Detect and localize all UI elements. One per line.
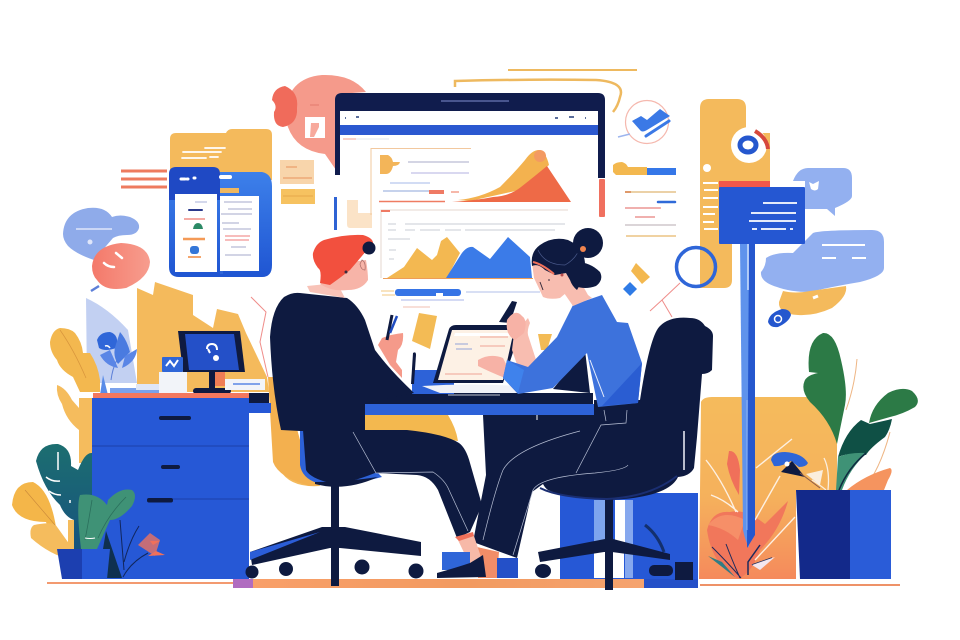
man's glasses [360,260,365,270]
woman's chair and legs [473,318,713,590]
man's neck and collar [307,283,345,298]
coral speech blob behind monitor [272,75,366,170]
lower blue chat bubble [761,230,884,292]
standing pen and notes [411,313,552,384]
laptop [422,325,518,395]
orange chair back [268,377,330,486]
table [249,370,594,441]
top area chart panel [343,139,571,215]
bottom mountain chart panel [381,210,568,307]
yellow skyline [137,282,320,486]
woman [478,228,642,407]
left potted plants [12,444,165,579]
floor line [47,579,900,588]
filing cabinet [92,393,249,579]
coral speech bubble [91,243,150,291]
blue speech bubble [63,208,139,260]
man's chair [246,428,424,586]
planter [796,490,850,579]
blue desk flower [97,332,165,395]
right mini list [613,162,676,236]
small notes left of monitor [280,160,372,230]
right potted plant [771,333,918,579]
man's legs [303,430,482,538]
woman's dark shadow under arm [553,350,590,393]
woman's foot [477,547,518,578]
pot [57,549,82,579]
man [270,235,486,578]
desk cards [159,357,265,393]
blue ring blob [768,309,791,327]
left tablet with yellow folder [121,129,272,277]
pale blue shape [86,298,137,383]
man's hand and pen [378,333,403,378]
tall yellow panel [700,99,770,288]
blue bloom [771,452,808,467]
coral lines [121,171,167,187]
man's head [320,260,368,290]
monitor [335,93,605,307]
diamond icons [623,263,650,296]
blue sign card [719,187,805,244]
right storage box behind chair [560,493,698,580]
top yellow connector lines [455,70,637,112]
check mark badge [618,100,670,144]
yellow leaves on left [50,328,100,550]
magnifier ring [676,248,716,286]
woman's hand on laptop [478,356,510,378]
small desk monitor [178,331,245,394]
upper blue chat bubble [770,168,852,216]
woman's neck [562,280,592,306]
woman's torso [503,295,642,407]
signpost pole [740,244,755,548]
right yellow box with plants [699,397,837,579]
man's torso [270,293,414,431]
pink branch lines [251,283,680,377]
woman's head [532,250,575,299]
woman's far arm and hand [512,318,538,382]
yellow blob [779,286,846,315]
man's foot [457,533,481,565]
coral foliage [707,501,788,578]
